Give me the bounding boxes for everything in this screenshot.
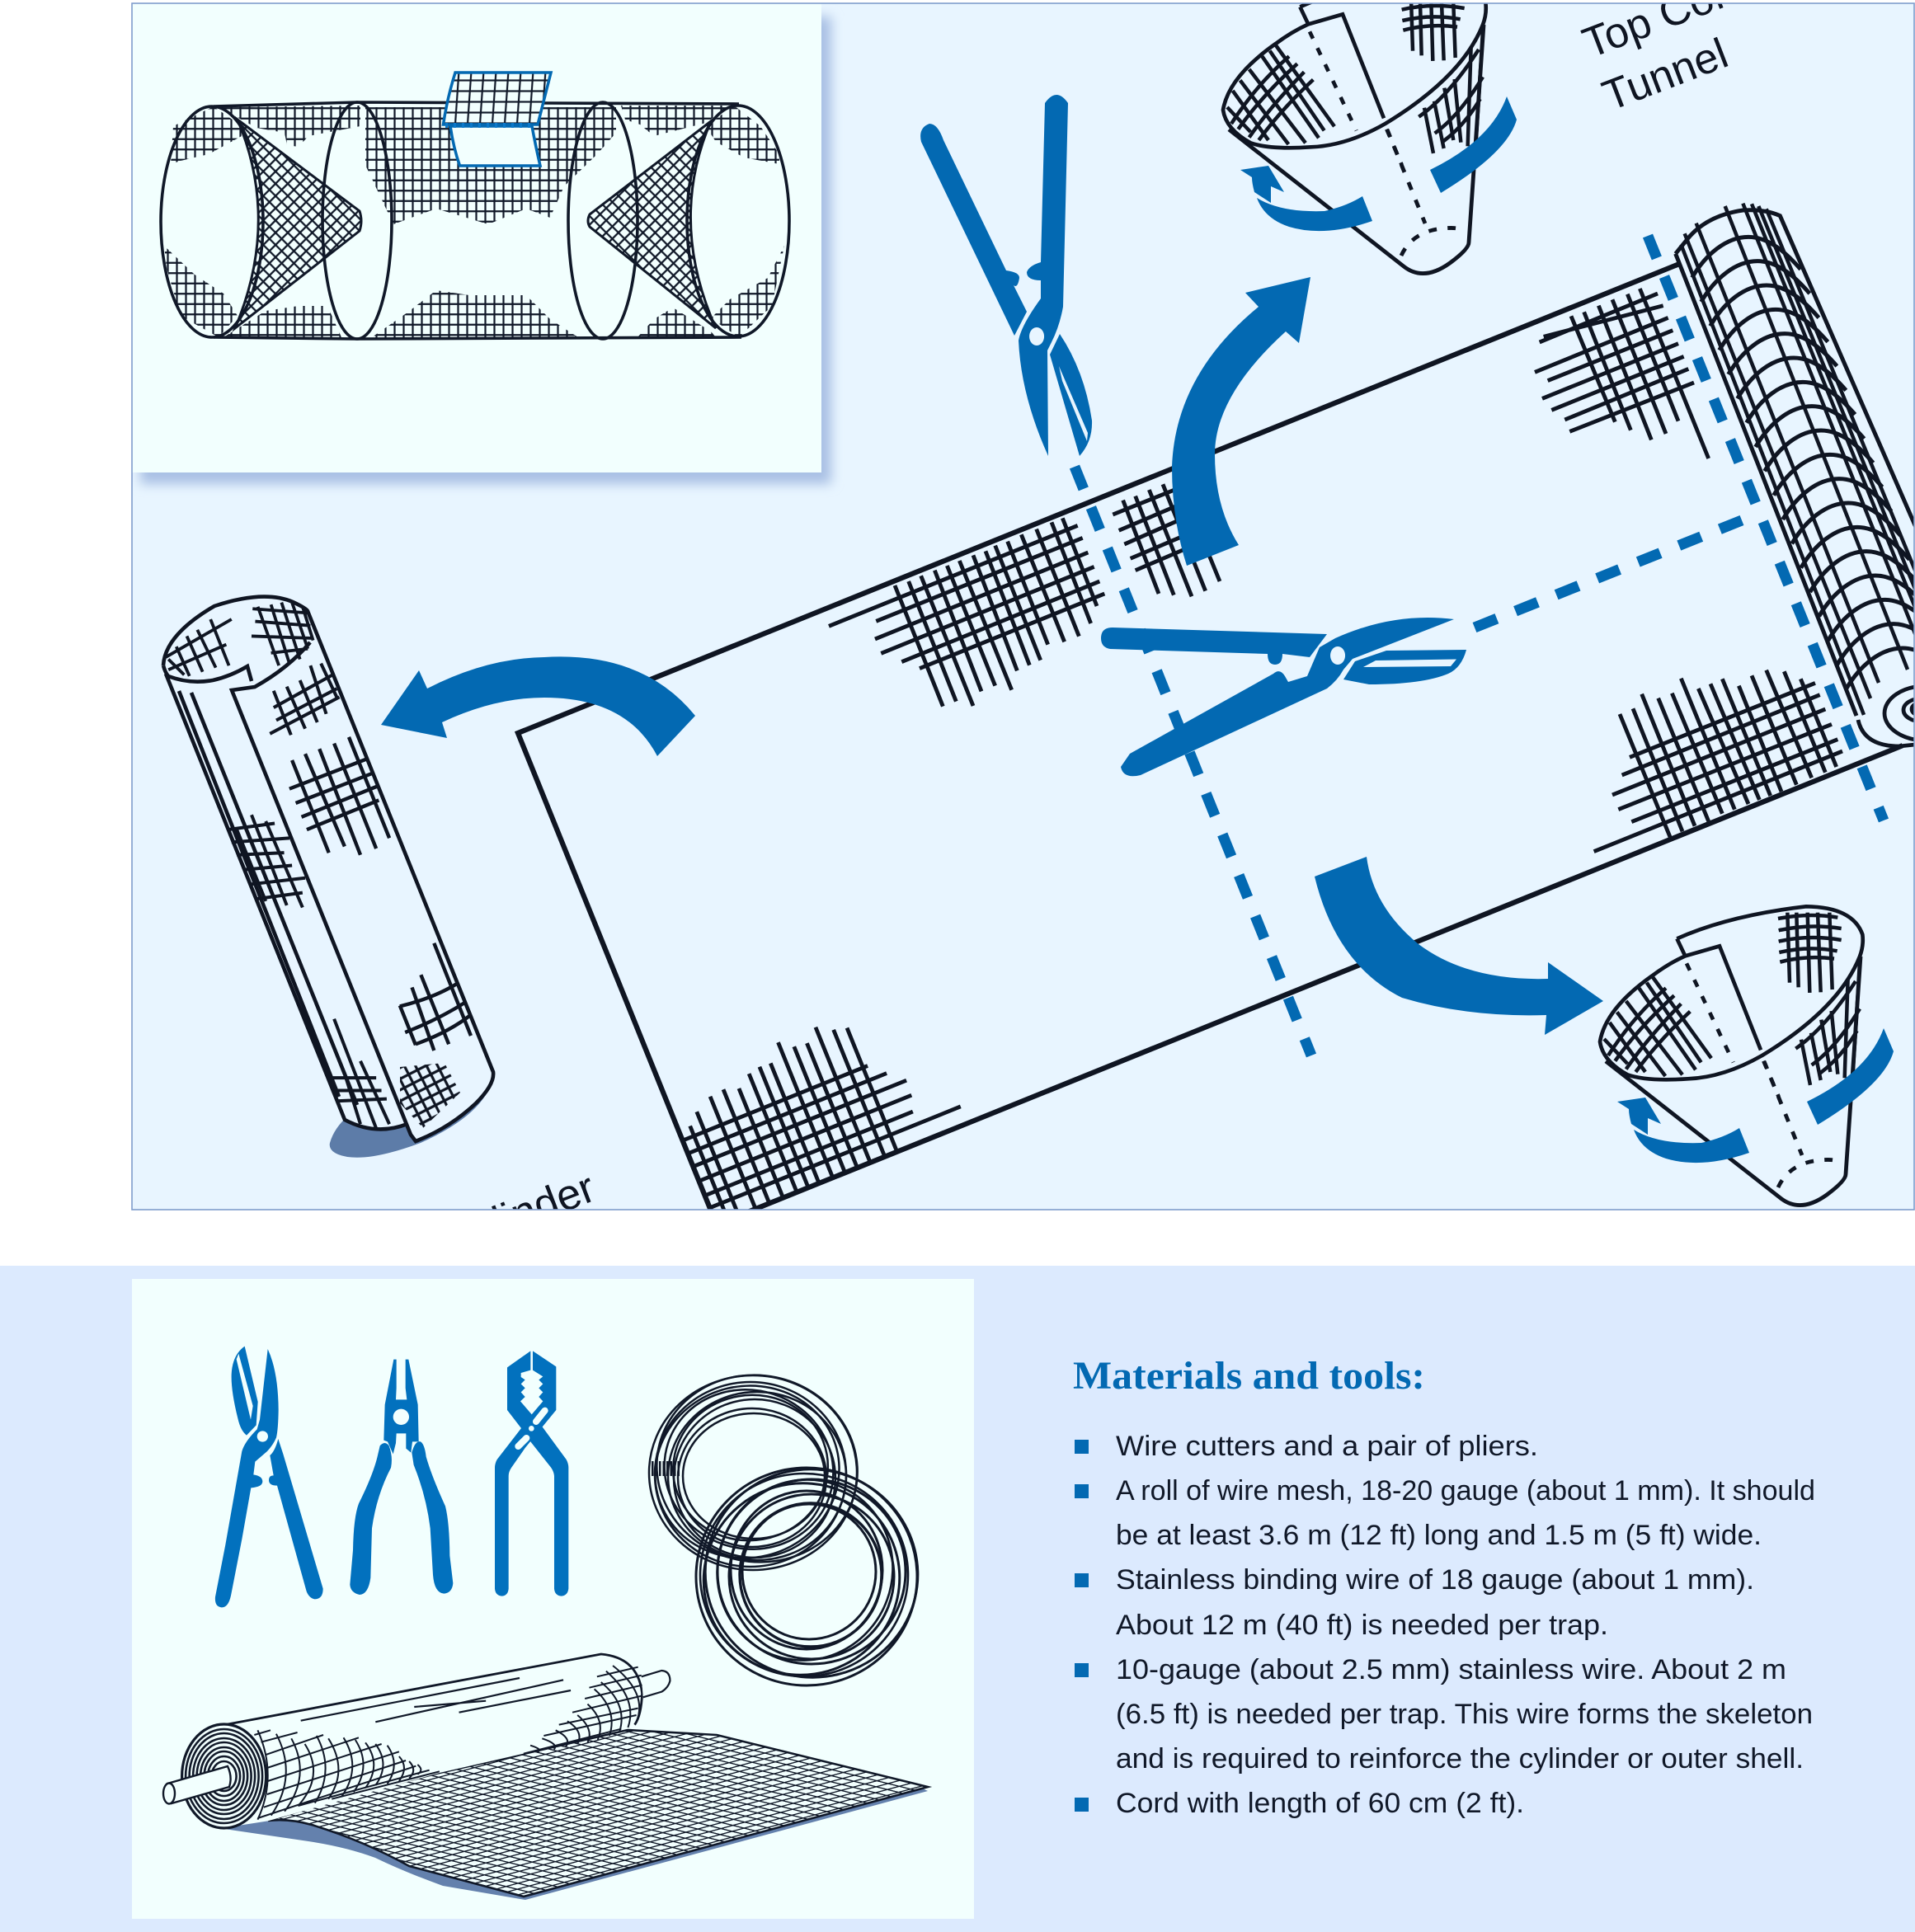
panel: tools illustration xyxy=(132,1279,974,1919)
materials list text: 10-gauge (about 2.5 mm) stainless wire. About 2 m xyxy=(1116,1654,1786,1685)
cone: bottom xyxy=(1600,906,1894,1206)
blue door patch xyxy=(444,73,551,166)
roll end spiral xyxy=(1858,686,1915,746)
trap outlines xyxy=(161,102,789,339)
icon: needle-nose pliers xyxy=(350,1360,453,1595)
materials list text: Cord with length of 60 cm (2 ft). xyxy=(1116,1788,1524,1819)
panel border xyxy=(132,3,1914,1210)
materials list text: Wire cutters and a pair of pliers. xyxy=(1116,1431,1538,1462)
materials list text: and is required to reinforce the cylinder or outer shell. xyxy=(1116,1743,1804,1775)
icon: binding wire coils xyxy=(637,1356,940,1699)
cylinder outlines xyxy=(163,597,493,1141)
panel: assembled trap inset xyxy=(132,3,821,472)
roll end spiral xyxy=(182,1724,266,1828)
roll body xyxy=(1676,210,1915,748)
mesh patch: by the cutting line xyxy=(1113,479,1220,596)
heading: materials and tools: Materials and tools: xyxy=(1073,1354,1425,1398)
roll core left xyxy=(167,1766,231,1803)
cylinder xyxy=(163,597,493,1158)
materials list text: be at least 3.6 m (12 ft) long and 1.5 m (5 ft) wide. xyxy=(1116,1520,1762,1551)
icon: shears, vertical xyxy=(920,95,1092,456)
roll core right xyxy=(642,1671,670,1697)
arrow: to cylinder xyxy=(381,656,695,756)
materials list text: A roll of wire mesh, 18-20 gauge (about 1 mm). It should xyxy=(1116,1475,1815,1507)
dashed cutting lines xyxy=(1075,236,1884,1055)
arrow: to bottom cone xyxy=(1315,857,1603,1035)
arrow: to top cone xyxy=(1172,277,1310,566)
panel: assembly diagram xyxy=(132,0,1915,1265)
inset shadow xyxy=(140,16,831,484)
trap funnels xyxy=(235,120,361,328)
cylinder body xyxy=(346,1076,492,1140)
materials list text: (6.5 ft) is needed per trap. This wire forms the skeleton xyxy=(1116,1699,1813,1730)
icon: shears, horizontal xyxy=(1101,618,1466,776)
mesh patch: sheet corner and sheet outline xyxy=(518,254,1903,1225)
roll body and mesh xyxy=(221,1654,670,1828)
mesh sheet xyxy=(518,254,1903,1225)
cylinder shadow xyxy=(330,1095,486,1158)
cylinder mesh patches xyxy=(166,603,471,1128)
cone: top xyxy=(1223,0,1517,274)
materials list text xyxy=(1116,1431,1815,1819)
label: top cone tunnel: Tunnel xyxy=(1597,30,1734,120)
materials list text: About 12 m (40 ft) is needed per trap. xyxy=(1116,1610,1608,1641)
icon: slip-joint pliers xyxy=(495,1351,568,1596)
mesh patch: near roll top xyxy=(1535,289,1709,458)
list bullets xyxy=(1075,1440,1089,1812)
roll wires across xyxy=(1692,237,1915,689)
roll edges xyxy=(1676,210,1915,716)
roll wires along xyxy=(1681,204,1915,715)
trap mesh shell xyxy=(164,106,784,339)
icon: wire snips xyxy=(215,1347,323,1607)
label: cylinder: Cylinder xyxy=(437,1163,601,1265)
mesh shadow xyxy=(224,1781,928,1900)
materials list text: Stainless binding wire of 18 gauge (about 1 mm). xyxy=(1116,1564,1754,1596)
panel: materials band xyxy=(0,1266,1915,1932)
wire mesh roll xyxy=(1676,204,1915,748)
mesh patch: near roll bottom xyxy=(1594,670,1842,852)
mesh patch: top centre xyxy=(829,518,1104,707)
mesh sheet xyxy=(268,1730,928,1897)
illustration: rolled mesh xyxy=(163,1654,928,1900)
label: top cone tunnel xyxy=(1577,0,1765,120)
